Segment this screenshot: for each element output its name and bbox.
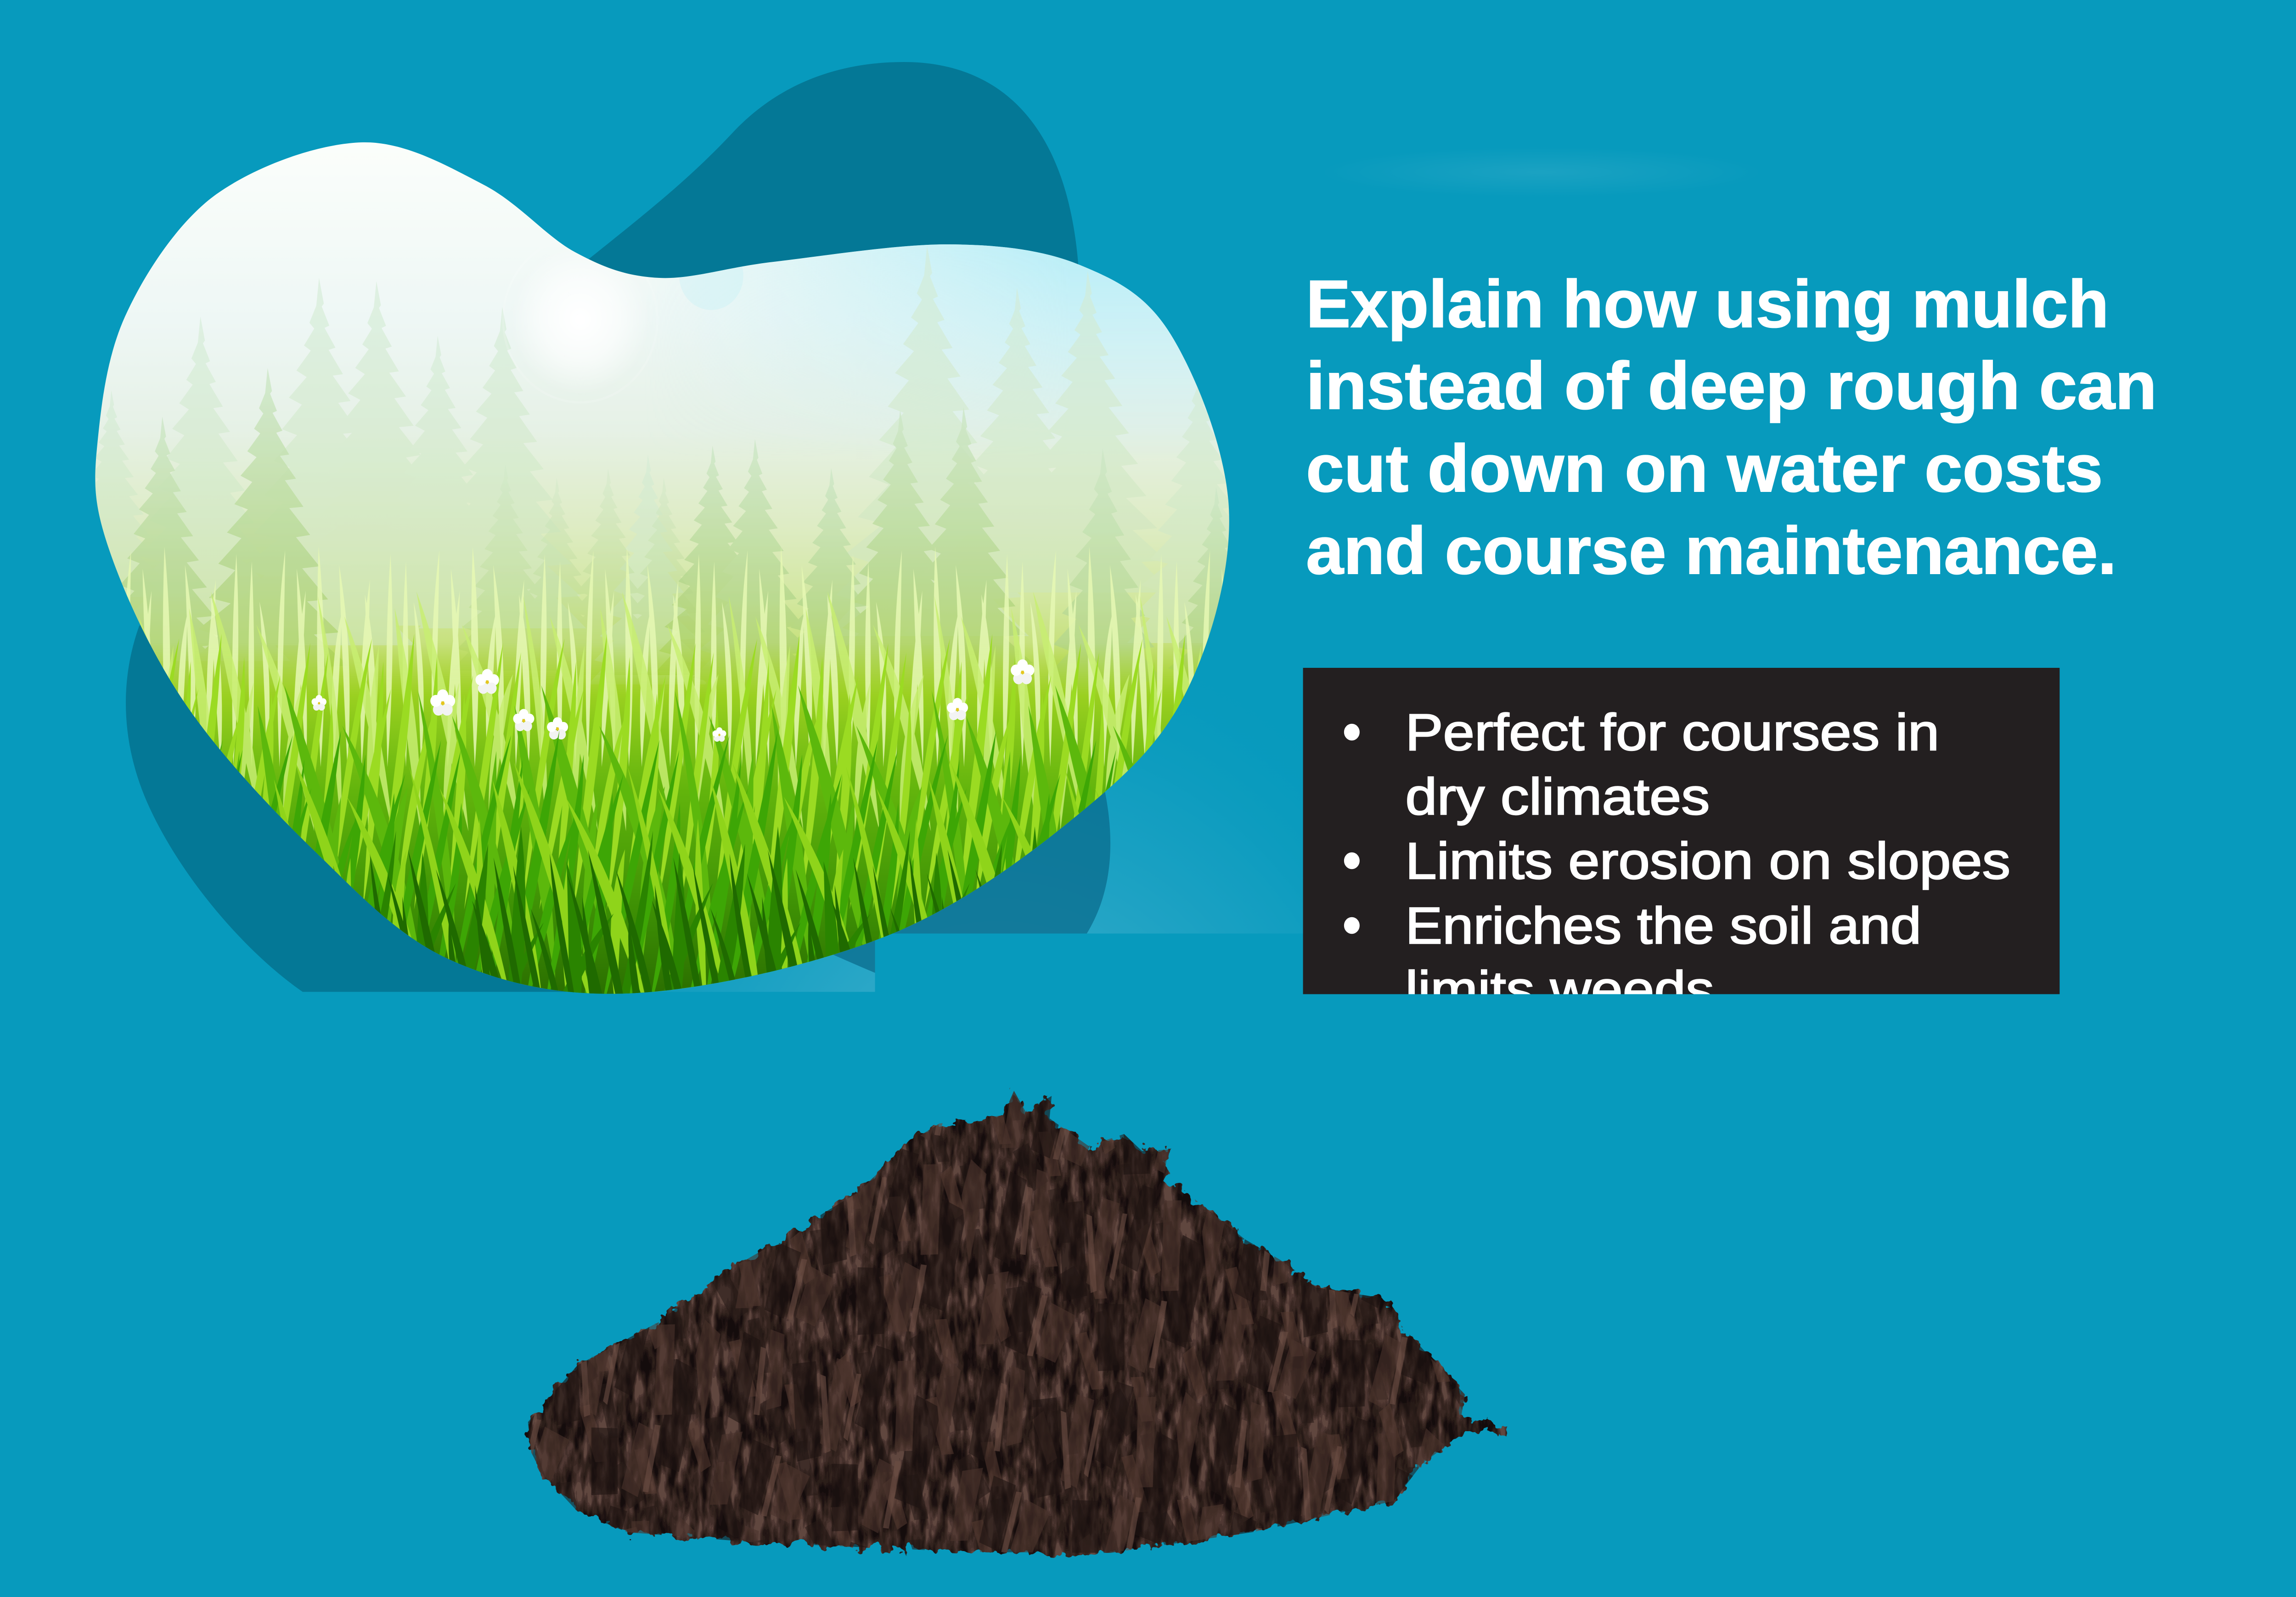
bullet: dry climates: Perfect for courses in — [1405, 704, 1939, 761]
heading — [1306, 266, 2157, 588]
back tree line — [57, 246, 1271, 684]
sun ring — [503, 237, 657, 402]
fog tree line — [460, 484, 689, 675]
bullet: soil and weeds: limits weeds — [1405, 961, 1714, 1018]
heading: and course maintenance. — [1306, 513, 2116, 588]
bullet: dry climates — [1345, 704, 1939, 825]
front tree line — [88, 368, 1276, 779]
mulch pile — [492, 1070, 1542, 1580]
bullet: soil and weeds: Enriches the soil and — [1405, 897, 1921, 954]
bullet: dry climates: dry climates — [1405, 768, 1710, 825]
grass — [85, 547, 1242, 1084]
yellow bar — [161, 1159, 2296, 1327]
heading: cut down on water costs — [1306, 431, 2103, 506]
sun — [510, 244, 651, 395]
sky gradient — [85, 133, 1242, 1006]
bullet: erosion: Limits erosion on slopes — [1405, 832, 2010, 890]
list background — [1303, 668, 2060, 1063]
blue sky tint — [599, 230, 1242, 468]
lens flare — [679, 241, 743, 310]
blob: lower left dark — [126, 597, 599, 1036]
bullet: soil and weeds — [1345, 897, 1921, 1018]
background glow — [471, 597, 1542, 1597]
heading: instead of deep rough can — [1306, 348, 2157, 423]
blob: upper right dark — [557, 62, 1080, 367]
flowers — [311, 660, 1034, 742]
panel: benefits list — [1303, 668, 2060, 1063]
heading: Explain how using mulch — [1306, 266, 2109, 341]
blob: lower right translucent — [814, 781, 1110, 999]
panel: meadow scene blob — [57, 133, 1276, 1084]
faint cloud highlight — [1319, 147, 1764, 198]
